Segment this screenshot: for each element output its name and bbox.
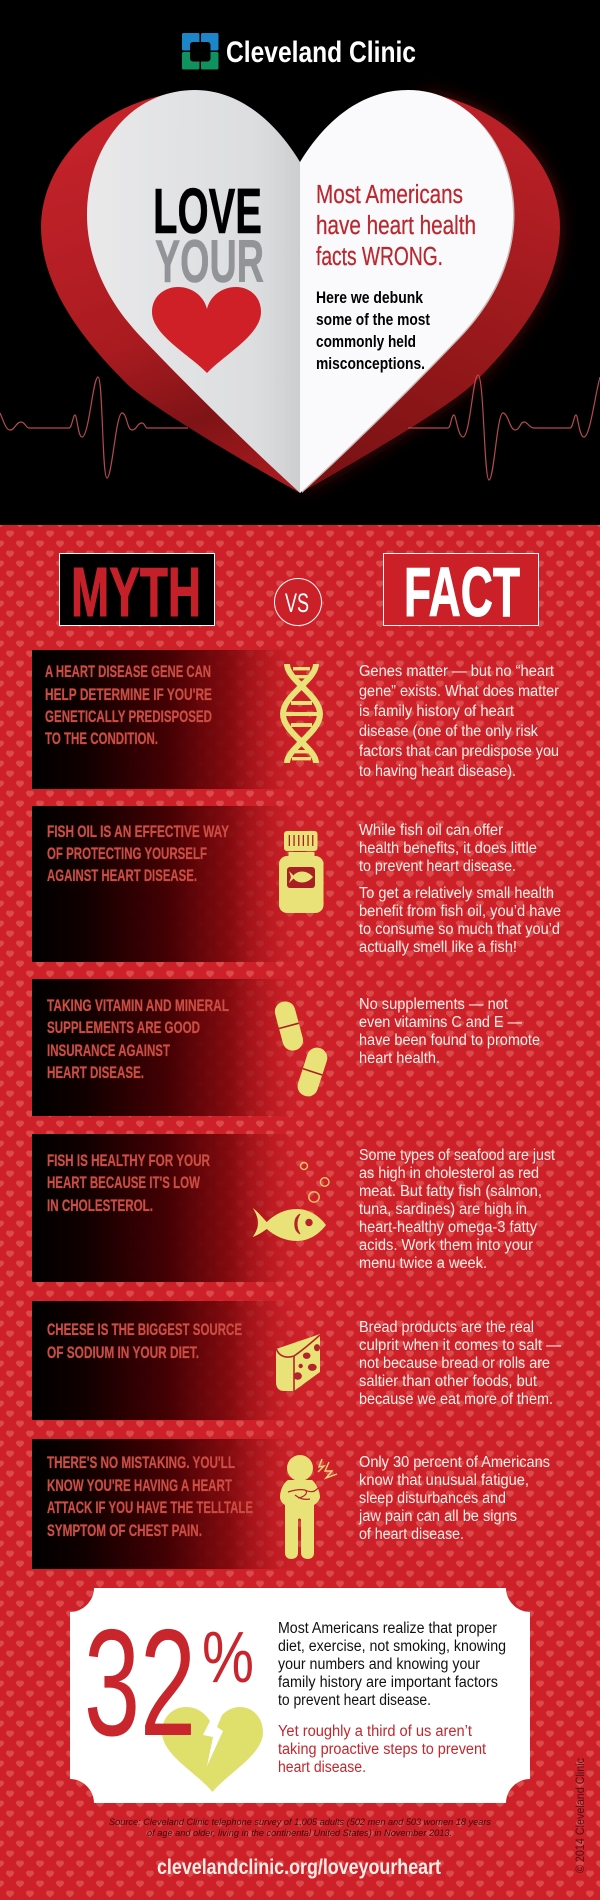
intro text: misconceptions. [316,354,425,373]
title: love your heart: LOVE [153,175,262,247]
myth card 5 [32,1301,306,1420]
fact text 4 [359,1147,556,1272]
fact text 3: have been found to promote [359,1032,540,1049]
icon: cheese [276,1334,320,1391]
intro text: Here we debunk [316,288,423,307]
fact text 4: tuna, sardines) are high in [359,1201,527,1218]
statistic: 32%: 32 [84,1598,196,1768]
myth card 4: HEART BECAUSE IT'S LOW [47,1173,201,1192]
fact text 1: is family history of heart [359,703,515,720]
fact text 2 [359,822,561,956]
fact text 3 [359,996,540,1067]
myth card 5: OF SODIUM IN YOUR DIET. [47,1343,199,1362]
fact text 1: gene” exists. What does matter [359,683,559,700]
fact text 6: Only 30 percent of Americans [359,1454,550,1471]
myth card 6: ATTACK IF YOU HAVE THE TELLTALE [47,1498,253,1517]
myth card 3: INSURANCE AGAINST [47,1041,170,1060]
intro text: commonly held [316,332,416,351]
fact text 1: disease (one of the only risk [359,723,538,740]
fact text 3: even vitamins C and E — [359,1014,522,1031]
intro headline [316,181,476,271]
myth card 3: HEART DISEASE. [47,1063,144,1082]
myth card 2: OF PROTECTING YOURSELF [47,844,207,863]
fact text 6: know that unusual fatigue, [359,1472,529,1489]
fact text 2: While fish oil can offer [359,822,503,839]
myth card 6 [32,1439,306,1569]
fact text 4: heart-healthy omega-3 fatty [359,1219,537,1236]
panel text: red [278,1723,487,1776]
myth card 2 [32,806,306,962]
fact text 2: to prevent heart disease. [359,858,516,875]
intro text: some of the most [316,310,430,329]
fact text 4: as high in cholesterol as red [359,1165,539,1182]
fact text 4: Some types of seafood are just [359,1147,556,1164]
fact text 4: acids. Work them into your [359,1237,533,1254]
fact text 6: sleep disturbances and [359,1490,506,1507]
panel: 32 percent statistic [70,1588,530,1803]
panel text: black: to prevent heart disease. [278,1692,431,1709]
fact text 1: to having heart disease). [359,763,516,780]
panel text: red: taking proactive steps to prevent [278,1741,487,1758]
logo: Cleveland Clinic: Cleveland Clinic [226,36,416,69]
fact text 2: actually smell like a fish! [359,939,517,956]
myth card 1: GENETICALLY PREDISPOSED [45,707,212,726]
fact text 5: culprit when it comes to salt — [359,1337,561,1354]
fact text 1 [359,663,559,780]
header background [0,0,600,525]
fact text 2: benefit from fish oil, you’d have [359,903,561,920]
intro headline: Most Americans [316,181,463,209]
myth card 1: HELP DETERMINE IF YOU'RE [45,685,212,704]
myth card 2: FISH OIL IS AN EFFECTIVE WAY [47,822,229,841]
myth card 6: KNOW YOU'RE HAVING A HEART [47,1476,232,1495]
myth card 1 [32,650,306,789]
fact text 6: jaw pain can all be signs [358,1508,517,1525]
myth card 4: FISH IS HEALTHY FOR YOUR [47,1151,210,1170]
heading: fact: FACT [404,553,520,631]
fact text 5 [359,1319,561,1408]
myth card 1: A HEART DISEASE GENE CAN [45,662,211,681]
logo: Cleveland Clinic [182,33,416,70]
fact text 6: of heart disease. [359,1526,464,1543]
title: love your heart: YOUR [155,228,264,295]
panel text: black: Most Americans realize that proper [278,1620,497,1637]
fact text 5: Bread products are the real [359,1319,534,1336]
fact text 5: saltier than other foods, but [359,1373,538,1390]
source note: Source: Cleveland Clinic telephone survey of 1,005 adults (502 men and 503 women 18 years [109,1817,491,1828]
icon: fish with bubbles [253,1162,329,1241]
myth card 3: TAKING VITAMIN AND MINERAL [47,996,229,1015]
myth card 6: THERE'S NO MISTAKING. YOU'LL [47,1453,235,1472]
heading: fact [384,553,538,631]
fact text 6 [358,1454,550,1543]
fact text 2: to consume so much that you’d [359,921,560,938]
icon: person with chest pain [280,1455,337,1559]
panel text: black: family history are important factors [278,1674,498,1691]
intro headline: have heart health [316,212,476,240]
panel text: black: diet, exercise, not smoking, knowing [278,1638,506,1655]
icon: pills [273,999,330,1099]
source note: of age and older, living in the continental United States) in November 2013. [147,1828,452,1839]
fact text 1: factors that can predispose you [359,743,559,760]
copyright: © 2014 Cleveland Clinic [573,1758,587,1873]
fact text 3: No supplements — not [359,996,509,1013]
website url: clevelandclinic.org/loveyourheart [157,1856,441,1879]
panel text: black: your numbers and knowing your [278,1656,480,1673]
myth card 4 [32,1134,306,1282]
intro headline: facts WRONG. [316,243,443,271]
fact text 4: meat. But fatty fish (salmon, [359,1183,542,1200]
heading: myth: MYTH [71,553,201,631]
heart illustration [41,90,560,493]
fact text 2: health benefits, it does little [359,840,537,857]
heading: myth [60,553,214,631]
fact text 1: Genes matter — but no “heart [359,663,555,680]
myth card 3: SUPPLEMENTS ARE GOOD [47,1018,200,1037]
panel text: red: heart disease. [278,1759,366,1776]
title: love your heart [152,175,264,373]
ECG line left [0,377,188,478]
myth card 3 [32,979,306,1116]
icon: DNA [283,664,320,763]
myth card 6: SYMPTOM OF CHEST PAIN. [47,1521,202,1540]
panel text: black [278,1620,506,1709]
ECG line right [408,375,600,480]
source note [109,1817,491,1839]
fact text 2: To get a relatively small health [359,885,554,902]
badge: vs: VS [285,588,309,618]
fact text 5: because we eat more of them. [359,1391,553,1408]
badge: vs [274,578,322,626]
statistic: 32%: % [202,1618,254,1698]
myth card 4: IN CHOLESTEROL. [47,1196,153,1215]
myth card 5: CHEESE IS THE BIGGEST SOURCE [47,1320,242,1339]
fact text 4: menu twice a week. [359,1255,487,1272]
fact text 5: not because bread or rolls are [359,1355,550,1372]
myth card 2: AGAINST HEART DISEASE. [47,866,197,885]
icon: fish oil bottle [279,831,324,913]
fact text 3: heart health. [359,1050,440,1067]
panel text: red: Yet roughly a third of us aren’t [278,1723,473,1740]
myth card 1: TO THE CONDITION. [45,729,158,748]
intro text [316,288,430,373]
red patterned background [0,525,600,1900]
icon: broken heart [162,1707,263,1792]
